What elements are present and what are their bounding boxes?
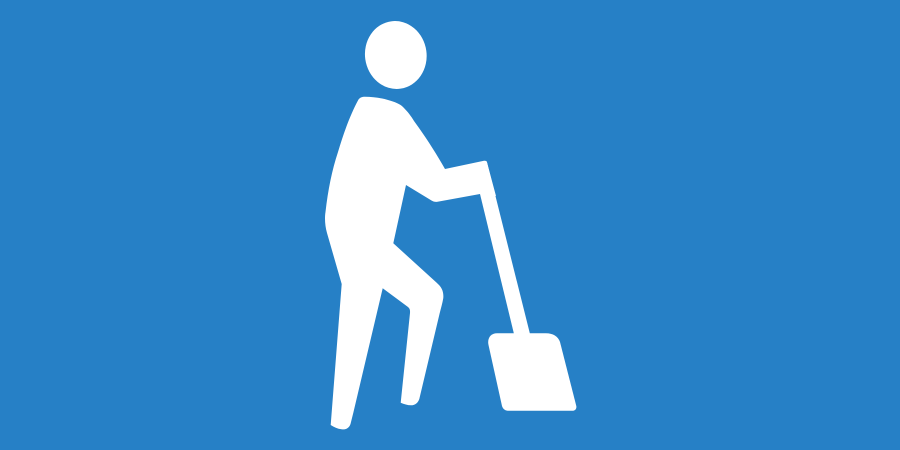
head: [361, 17, 431, 93]
shovel blade: [488, 333, 576, 411]
body and legs: [325, 97, 496, 429]
shovel shaft: [480, 161, 530, 334]
